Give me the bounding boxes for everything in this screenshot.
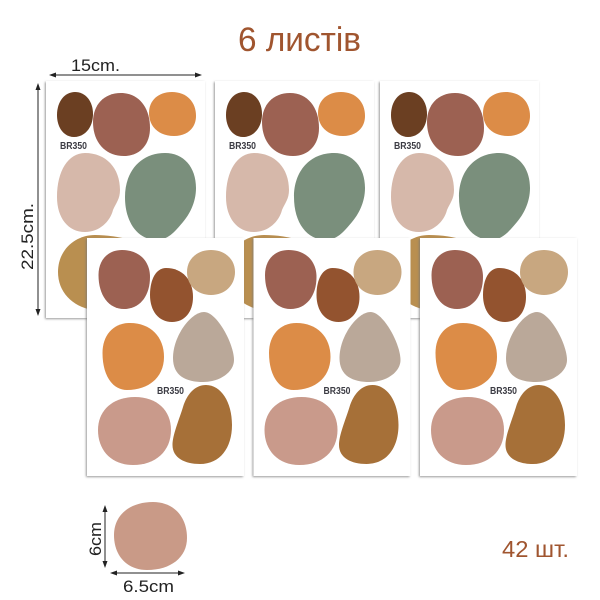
- height label: 6cm: 6cm: [86, 522, 105, 556]
- back sticker sheet 2: [215, 81, 374, 318]
- width label: 15cm: 15cm.: [71, 56, 120, 75]
- quantity label: 42 шт.: [502, 536, 569, 562]
- front sticker sheet 1: [87, 238, 244, 476]
- arrow: sheet width: [49, 72, 202, 78]
- title: 6 листів: [238, 21, 361, 59]
- arrow: sticker height: [102, 505, 108, 568]
- arrow: sheet height: [36, 83, 40, 316]
- front sticker sheet 2: BR350: [324, 386, 351, 397]
- width label: 6.5cm: 6.5cm: [123, 577, 174, 596]
- back sticker sheet 3: [380, 81, 539, 318]
- back sticker sheet 3: BR350: [394, 141, 421, 152]
- height label: 22.5cm: 22.5cm.: [18, 203, 37, 270]
- single sticker sample: [114, 502, 187, 570]
- back sticker sheet 1: [46, 81, 205, 318]
- front sticker sheet 3: BR350: [490, 386, 517, 397]
- front sticker sheet 3: [420, 238, 577, 476]
- back sticker sheet 2: BR350: [229, 141, 256, 152]
- back sticker sheet 1: BR350: [60, 141, 87, 152]
- arrow: sticker width: [110, 570, 185, 576]
- front sticker sheet 1: BR350: [157, 386, 184, 397]
- front sticker sheet 2: [254, 238, 410, 476]
